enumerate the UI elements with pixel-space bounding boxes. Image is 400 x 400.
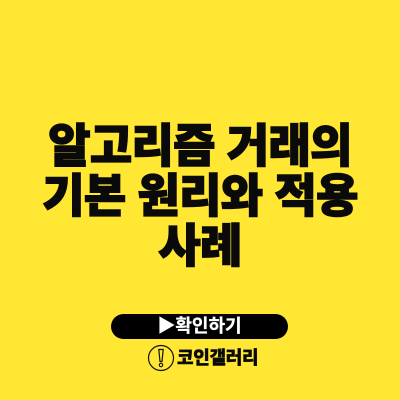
title: 기본 원리와 적용 bbox=[42, 170, 358, 222]
button: confirm: ▶확인하기 bbox=[157, 316, 242, 336]
title bbox=[42, 120, 358, 272]
brand name: 코인갤러리 bbox=[177, 348, 258, 368]
button: confirm bbox=[111, 314, 288, 339]
icon: exclamation in circle bbox=[148, 344, 174, 372]
title: 사례 bbox=[158, 220, 242, 272]
title: 알고리즘 거래의 bbox=[48, 120, 352, 172]
